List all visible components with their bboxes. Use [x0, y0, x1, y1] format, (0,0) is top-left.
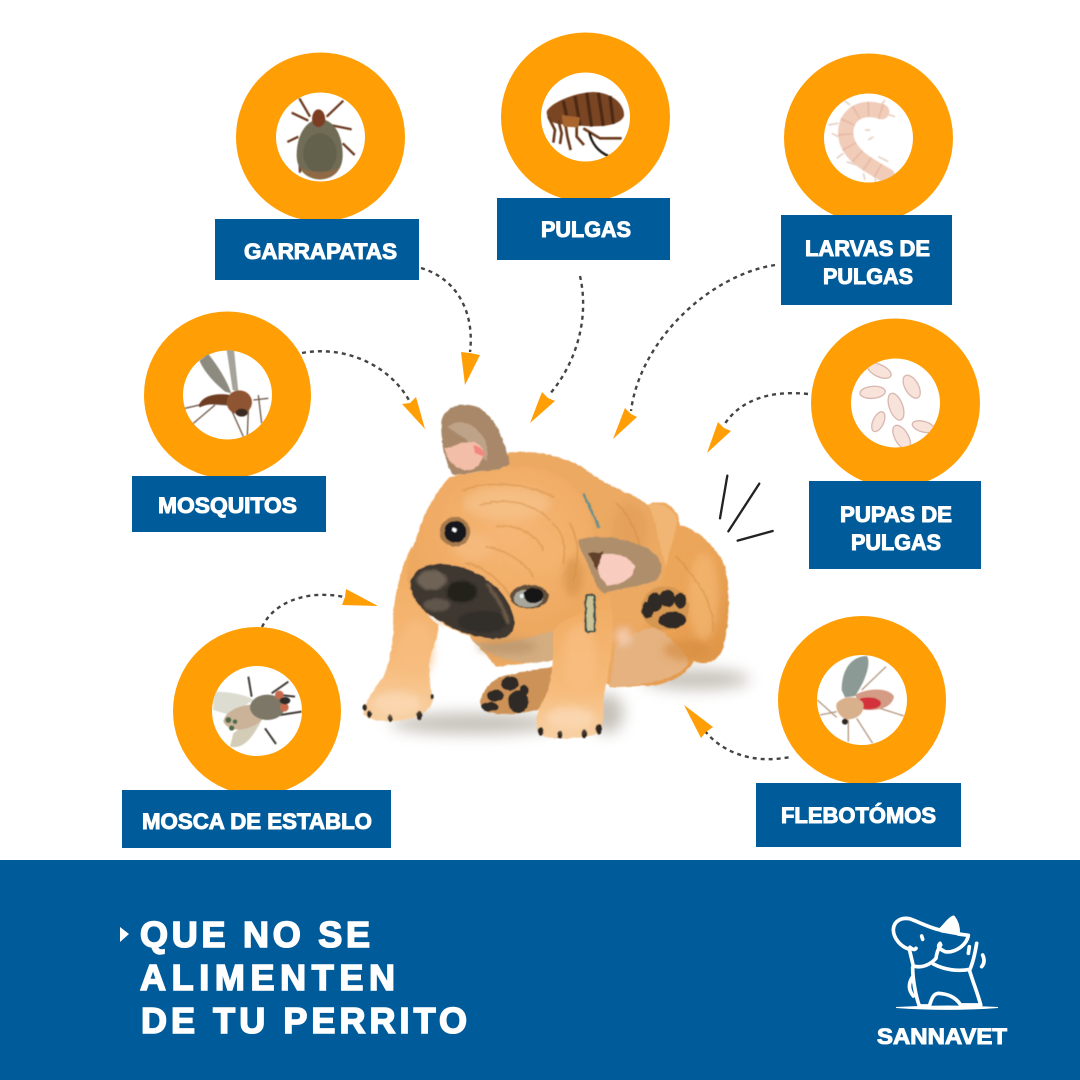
dog haunch [600, 502, 729, 687]
logo: sannavet [877, 917, 1008, 1049]
icon: pupae [860, 360, 936, 452]
muzzle [411, 564, 514, 639]
label: garrapatas: GARRAPATAS [244, 239, 397, 264]
logo ground line [896, 1006, 998, 1009]
label: mosquitos [132, 476, 326, 532]
dog back [467, 452, 668, 687]
label: larvas de pulgas [781, 215, 952, 305]
footer headline: DE TU PERRITO [141, 1000, 467, 1041]
label: mosquitos: MOSQUITOS [158, 493, 297, 518]
connector: larvas de pulgas [613, 265, 775, 439]
fur tone patches [372, 487, 718, 730]
footer band [0, 860, 1080, 1080]
raised paw [641, 586, 689, 630]
dog eye right [510, 585, 549, 609]
icon: bullet arrow [120, 927, 129, 942]
dog belly [610, 628, 688, 687]
label: flebotomos [756, 783, 961, 847]
icon: larva [828, 100, 895, 185]
label: pulgas: PULGAS [541, 217, 631, 242]
logo dog [893, 917, 984, 1006]
icon: tick [287, 98, 355, 179]
dog right front leg [537, 593, 613, 739]
dog shadow [390, 669, 750, 734]
dog lying paw [480, 667, 553, 714]
ring: pupas de pulgas [831, 338, 960, 468]
dog chest [470, 630, 557, 662]
scratch marks [720, 476, 773, 541]
connector: pupas de pulgas [707, 393, 808, 453]
footer headline [140, 914, 467, 1041]
ring: flebotomos [798, 636, 926, 764]
icon: flea [547, 92, 624, 156]
collar tag [586, 595, 595, 632]
label: larvas de pulgas: LARVAS DE [805, 236, 930, 261]
dog head [407, 466, 600, 637]
icon: mosquito [185, 350, 268, 437]
dog ear right [578, 537, 662, 593]
label: flebotomos: FLEBOTÓMOS [781, 803, 936, 828]
label: pupas de pulgas: PULGAS [851, 530, 941, 555]
label: larvas de pulgas: PULGAS [823, 264, 913, 289]
icon: stable fly [213, 677, 302, 747]
connector: flebotomos [684, 705, 790, 759]
connector: garrapatas [421, 268, 480, 385]
dog claws [362, 694, 602, 739]
head wrinkles [463, 484, 713, 630]
label: pupas de pulgas: PUPAS DE [840, 502, 952, 527]
label: garrapatas [215, 219, 419, 280]
ring: garrapatas [256, 72, 385, 202]
collar strap [583, 493, 599, 528]
dog left front leg [363, 547, 439, 721]
ring: larvas de pulgas [804, 74, 933, 202]
connector: pulgas [530, 276, 583, 423]
footer headline: ALIMENTEN [140, 957, 395, 998]
muzzle tone [417, 570, 508, 632]
connector: mosquitos [302, 351, 425, 429]
icon: sand fly [817, 656, 904, 743]
label: mosca de establo [122, 790, 391, 848]
dog eye left [440, 517, 470, 546]
ring: pulgas [521, 52, 650, 182]
ring: mosca de establo [192, 646, 322, 776]
footer headline: QUE NO SE [140, 914, 370, 955]
ring: mosquitos [164, 331, 292, 459]
illustration: scratching puppy [362, 405, 773, 739]
label: pulgas [497, 198, 670, 260]
label: pupas de pulgas [809, 481, 981, 569]
label: mosca de establo: MOSCA DE ESTABLO [142, 809, 372, 834]
logo wordmark: SANNAVET [877, 1024, 1008, 1049]
dog ear left [441, 405, 510, 475]
dog thigh fold [648, 504, 677, 567]
chin [427, 614, 445, 629]
connector: mosca de establo [262, 589, 378, 627]
